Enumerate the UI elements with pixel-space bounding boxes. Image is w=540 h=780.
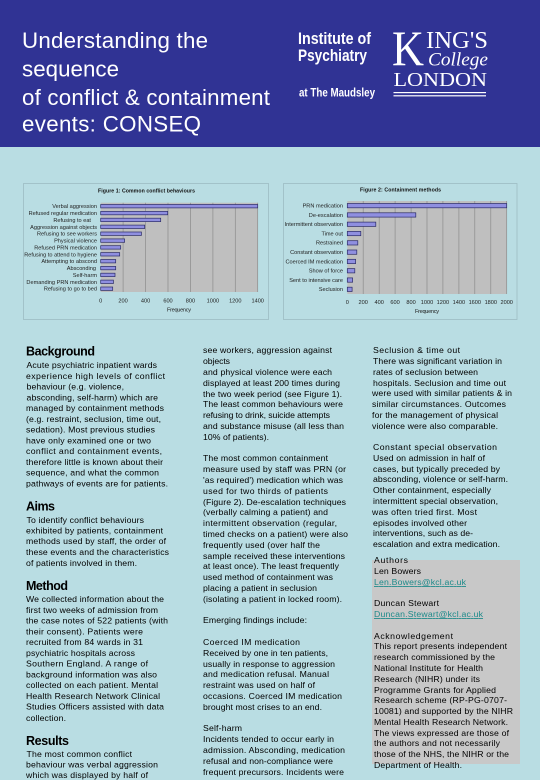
category labels: Time out [321, 231, 343, 237]
logo: King's College London: ING'S [426, 28, 488, 54]
header band [0, 0, 540, 147]
text block: Constant special observation: Constant special observation [373, 442, 497, 452]
text block: Aims [26, 515, 170, 568]
heading: Aims: Aims [26, 500, 55, 514]
text block: Method: background information was also [26, 669, 157, 679]
text block: Seclusion and time out: for the management of physical [372, 410, 498, 420]
text block: Aims: exhibited by patients, containment [26, 526, 164, 536]
text block: Constant special observation: interventions, such as de- [373, 528, 473, 538]
text block: Results continued: at least once). The least frequently [203, 561, 340, 571]
chart: Figure 1 common conflict behaviours [24, 184, 268, 320]
text block: Background: absconding, self-harm) which are [26, 392, 158, 402]
value axis: 1400 [251, 298, 264, 304]
text block: Constant special observation: absconding, violence or self-harm. [373, 474, 508, 484]
text block: Self-harm: Self-harm [203, 723, 242, 733]
value axis [346, 300, 513, 315]
acknowledgement: This report presents independent [374, 641, 508, 651]
text block: Coerced IM medication: brought most crises to an end. [203, 702, 322, 712]
authors: Authors [374, 555, 409, 565]
acknowledgement: Programme Grants for Applied [374, 685, 496, 695]
text block: Results continued [203, 345, 348, 625]
category labels [285, 204, 343, 293]
title [22, 28, 271, 136]
acknowledgement: Department of Health. [374, 760, 462, 770]
text block: Seclusion and time out: violence were also comparable. [372, 421, 498, 431]
text block: Results continued: and substance misuse (all less than [203, 421, 344, 431]
value axis: 1000 [421, 300, 433, 306]
authors: Len.Bowers@kcl.ac.uk [374, 577, 467, 587]
text block: Constant special observation: Other containment, especially [373, 485, 492, 495]
logo: Institute of Psychiatry [298, 30, 376, 100]
acknowledgement: those of the NHS, the NIHR or the [374, 749, 509, 759]
value axis: 800 [406, 300, 416, 306]
text block: Coerced IM medication: restraint was used on half of [203, 680, 316, 690]
text block: Results continued: Emerging findings include: [203, 615, 307, 625]
text block: Seclusion and time out [371, 345, 512, 431]
acknowledgement: National Institute for Health [374, 663, 483, 673]
text block: Method: collection. [26, 713, 66, 723]
authors: Duncan Stewart [374, 598, 440, 608]
text block: Results continued: timed checks on a patient) were also [203, 529, 348, 539]
category labels: Constant observation [290, 250, 343, 256]
text block: Background: Acute psychiatric inpatient wards [26, 360, 158, 370]
logo: King's College London: College [428, 50, 488, 70]
text block: Results continued: 'as required') medication which was [203, 475, 344, 485]
acknowledgement: Research scheme (RP-PG-0707- [374, 695, 507, 705]
heading: Background: Background [26, 344, 95, 358]
value axis: 2000 [500, 300, 513, 306]
text block: Results continued: measure used by staff was PRN (or [203, 464, 346, 474]
text block: Results continued: frequently used (over half the [203, 540, 320, 550]
category labels: Coerced IM medication [285, 259, 343, 265]
text block: Constant special observation: intermittent special observation, [373, 496, 498, 506]
text block: Results continued: used method of containment was [203, 572, 334, 582]
title: sequence [22, 56, 119, 82]
text block: Results continued: (verbally calming a patient) and [203, 507, 328, 517]
text block: Background: conflict and containment events, [26, 446, 162, 456]
value axis: Frequency [415, 309, 439, 315]
text block: Constant special observation: cases, but typically preceded by [373, 464, 501, 474]
text block: Method: collected on each patient. Mental [26, 680, 158, 690]
text block: Constant special observation: episodes involved other [373, 518, 467, 528]
category labels: Refusing to eat [53, 218, 91, 224]
text block: Results: which was displayed by half of [25, 770, 149, 780]
text block: Background [26, 360, 168, 488]
category labels: Sent to intensive care [289, 278, 343, 284]
text block: Results continued: placing a patient in seclusion [203, 583, 317, 593]
value axis: 200 [359, 300, 368, 306]
text block: Results continued: intermittent observation (regular, [203, 518, 337, 528]
text block: Seclusion and time out: rates of seclusion between [373, 367, 478, 377]
text block: Results continued: sample received these interventions [203, 551, 346, 561]
text block: Method: Studies Officers assisted with data [26, 702, 164, 712]
text block: Coerced IM medication: occasions. Coerced IM medication [203, 691, 342, 701]
acknowledgement: research commissioned by the [374, 652, 495, 662]
value axis: 400 [375, 300, 384, 306]
acknowledgement: the authors and not necessarily [374, 738, 501, 748]
text block: Results continued: the two week period (see Figure 1). [203, 389, 342, 399]
value axis [99, 298, 264, 314]
value axis: 1800 [485, 300, 497, 306]
value axis: 0 [346, 300, 349, 306]
text block: Results continued: displayed at least 200 times during [203, 378, 340, 388]
logo: King's College London: LONDON [394, 69, 487, 91]
text block: Seclusion and time out: hospitals. Seclusion and time out [373, 378, 507, 388]
value axis: 1000 [207, 298, 219, 304]
logo: Institute of Psychiatry: Psychiatry [298, 47, 368, 65]
text block: Self-harm: refusal and non-compliance were [203, 756, 333, 766]
acknowledgement: Mental Health Research Network. [374, 717, 508, 727]
text block: Aims: these events and the characteristics [26, 547, 170, 557]
logo: King's College London: K [392, 20, 424, 76]
acknowledgement: Acknowledgement [374, 631, 454, 641]
bars [347, 204, 507, 292]
text block: Self-harm: admission. Absconding, medication [203, 745, 345, 755]
text block: Results continued: (Figure 2). De-escalation techniques [203, 497, 347, 507]
text block: Background: pathways of events are for patients. [26, 478, 168, 488]
text block: Background: sequence, and what the common [26, 468, 159, 478]
text block: Method: psychiatric hospitals across [26, 648, 136, 658]
text block: Constant special observation [371, 442, 508, 549]
acknowledgement [374, 631, 513, 770]
value axis: Frequency [167, 308, 191, 314]
text block: Background: therefore little is known about their [26, 457, 163, 467]
value axis: 200 [118, 298, 128, 304]
text block: Self-harm [203, 723, 345, 780]
text block: Results continued: The least common behaviours were [203, 399, 343, 409]
category labels: De-escalation [309, 213, 343, 219]
acknowledgement: Research (NIHR) under its [374, 674, 481, 684]
text block: Method: recruited from 84 wards in 31 [26, 637, 143, 647]
category labels: Refused regular medication [29, 211, 97, 217]
category labels: Absconding [67, 266, 96, 272]
value axis: 1600 [469, 300, 481, 306]
category labels: Verbal aggression [52, 204, 97, 210]
value axis: 600 [163, 298, 173, 304]
text block: Seclusion and time out: There was significant variation in [373, 356, 502, 366]
category labels [24, 204, 97, 293]
category labels: Self-harm [73, 273, 97, 279]
text block: Results continued: and physical violence were each [203, 367, 332, 377]
text block: Self-harm: Incidents tended to occur early in [203, 734, 334, 744]
category labels: Intermittent observation [285, 222, 343, 228]
text block: Results continued: The most common containment [203, 453, 329, 463]
value axis: 1200 [437, 300, 449, 306]
logo: Institute of Psychiatry: at The Maudsley [299, 88, 376, 100]
text block: Coerced IM medication: usually in response to aggression [203, 659, 335, 669]
text block: Method: their consent). Patients were [26, 626, 143, 636]
category labels: Refusing to go to bed [44, 287, 97, 293]
text block: Background: sedation). Most previous studies [26, 424, 156, 434]
text block: Method: Southern England. A range of [26, 658, 149, 668]
text block: Results continued: (isolating a patient in locked room). [203, 594, 342, 604]
category labels: Attempting to abscond [41, 259, 97, 265]
authors: Duncan.Stewart@kcl.ac.uk [374, 609, 484, 619]
category labels: PRN medication [303, 204, 343, 210]
text block: Seclusion and time out: similar circumstances. Outcomes [372, 399, 507, 409]
acknowledgement: The views expressed are those of [374, 728, 510, 738]
text block: Method: the case notes of 522 patients (with [26, 616, 168, 626]
text block: Results: behaviour was verbal aggression [26, 760, 158, 770]
text block: Coerced IM medication [203, 637, 342, 712]
text block: Aims: methods used by staff, the order of [26, 536, 167, 546]
logo: Institute of Psychiatry: Institute of [298, 30, 371, 48]
text block: Results continued: see workers, aggression against [203, 345, 333, 355]
title: of conflict & containment [22, 85, 271, 110]
value axis: 400 [141, 298, 150, 304]
category labels: Physical violence [54, 239, 97, 245]
text block: Background: behaviour (e.g. violence, [26, 382, 124, 392]
panel: authors and acknowledgement [372, 555, 520, 770]
text block: Method: We collected information about the [26, 594, 164, 604]
text block: Coerced IM medication: and medication refusal. Manual [203, 669, 329, 679]
text block: Results continued: 10% of patients). [203, 432, 269, 442]
authors [374, 555, 484, 619]
category labels: Refusing to attend to hygiene [24, 252, 97, 258]
text block: Method [26, 594, 168, 723]
text block: Background: have only examined one or two [26, 435, 151, 445]
authors: Len Bowers [374, 566, 422, 576]
text block: Constant special observation: escalation and extra medication. [373, 539, 500, 549]
category labels: Aggression against objects [30, 225, 97, 231]
text block: Results: The most common conflict [26, 749, 133, 759]
category labels: Demanding PRN medication [26, 280, 97, 286]
value axis: 800 [186, 298, 195, 304]
text block: Self-harm: frequent precursors. Incidents were [203, 767, 344, 777]
logo: King's College London [392, 20, 488, 96]
category labels: Refused PRN medication [34, 246, 97, 252]
chart: Figure 2 containment methods [284, 184, 517, 320]
text block: Constant special observation: was often tried first. Most [371, 507, 478, 517]
text block: Background: (e.g. restraint, seclusion, time out, [26, 414, 161, 424]
title: Understanding the [22, 28, 208, 53]
text block: Results continued: used for two thirds of patients [203, 486, 329, 496]
category labels: Restrained [316, 241, 343, 247]
category labels: Show of force [309, 269, 343, 275]
text block: Constant special observation: Used on admission in half of [373, 453, 486, 463]
plot area [101, 203, 258, 292]
heading: Method: Method [26, 579, 68, 593]
text block: Seclusion and time out: Seclusion & time out [373, 345, 461, 355]
text block: Coerced IM medication: Coerced IM medication [203, 637, 300, 647]
value axis: 1200 [229, 298, 242, 304]
text block: Results continued: objects [203, 356, 231, 366]
value axis: 1400 [453, 300, 465, 306]
value axis: 0 [99, 298, 102, 304]
text block: Background: experience high levels of conflict [26, 371, 166, 381]
heading: Results: Results [26, 734, 69, 748]
text block: Aims: To identify conflict behaviours [26, 515, 145, 525]
title: events: CONSEQ [22, 112, 201, 136]
plot area [347, 201, 507, 294]
category labels: Refusing to see workers [37, 232, 97, 238]
acknowledgement: 10081) and supported by the NIHR [374, 706, 513, 716]
text block: Coerced IM medication: Received by one in ten patients, [203, 648, 328, 658]
text block: Results continued: refusing to drink, suicide attempts [203, 410, 331, 420]
text block: Aims: of patients involved in them. [26, 558, 137, 568]
chart title: Figure 2: Containment methods [360, 188, 441, 194]
chart title: Figure 1: Common conflict behaviours [98, 188, 195, 194]
text block: Background: managed by containment methods [26, 403, 165, 413]
text block: Method: Health Research Network Clinical [26, 691, 160, 701]
text block: Seclusion and time out: were used with similar patients & in [371, 388, 512, 398]
category labels: Seclusion [319, 287, 343, 293]
value axis: 600 [390, 300, 400, 306]
bars [101, 204, 258, 290]
text block: Method: first two weeks of admission from [26, 605, 158, 615]
text block: Results [25, 749, 158, 780]
